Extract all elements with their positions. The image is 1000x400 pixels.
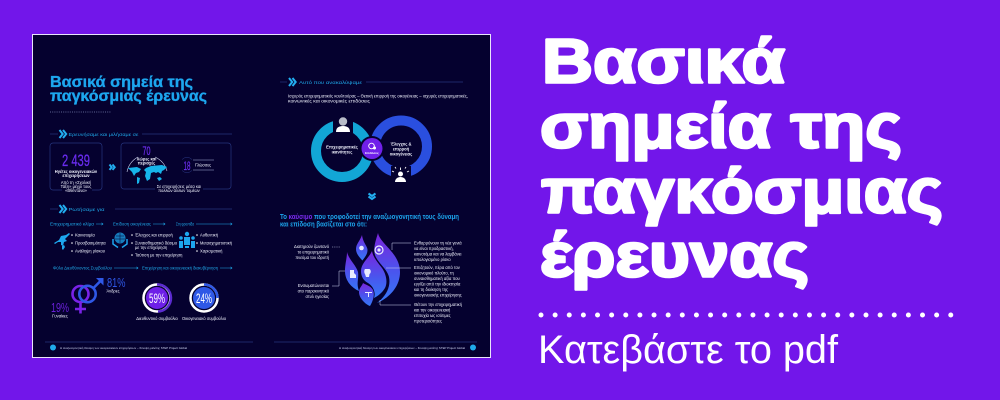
right page footer bbox=[274, 342, 477, 350]
stat box: next generation leaders: 2 439 bbox=[62, 152, 90, 170]
linked rings diagram: επιρροή bbox=[393, 146, 410, 152]
linked rings diagram: Έλεγχος & bbox=[391, 142, 412, 146]
stat box: next generation leaders: «Βθέντανα» bbox=[65, 188, 88, 193]
linked rings diagram: οικογένειας bbox=[390, 152, 412, 156]
chart: CEO gender split: Άνδρες bbox=[106, 288, 120, 294]
main title bbox=[540, 28, 943, 290]
stat box: next generation leaders: Από τη «Σχολική bbox=[61, 180, 92, 185]
section header: we asked about: Ρωτήσαμε για bbox=[68, 207, 105, 212]
section header: surveyed: Ερευνήσαμε και μιλήσαμε σε bbox=[68, 132, 139, 137]
callouts: right of flame: Ενθαρρύνουν τη νέα γενιά bbox=[414, 240, 462, 246]
icon: entrepreneur bbox=[333, 114, 353, 133]
callouts: left of flame: Ενσωματώνονται bbox=[298, 283, 329, 288]
bullet list: family performance: Συναισθηματικό δέσιμο bbox=[135, 240, 178, 246]
chart: CEO gender split: Γυναίκες bbox=[52, 314, 68, 318]
male symbol bbox=[79, 280, 102, 302]
chart: CEO gender split: 19% bbox=[51, 300, 69, 315]
report preview panel bbox=[32, 34, 491, 358]
chart: CEO gender split: 81% bbox=[107, 275, 126, 290]
donut: family board: Οικογενειακό συμβούλιο bbox=[182, 316, 227, 321]
left page footer bbox=[45, 342, 253, 350]
stat box: countries and languages: Σε επιχειρήσεις μέσα και bbox=[157, 184, 201, 189]
stat box: countries and languages: 70 bbox=[142, 144, 151, 158]
callouts: left of flame bbox=[294, 244, 345, 299]
left page footer: Η αναζωογονητική δύναμη των οικογενειακών επιχειρήσεων – Σύνοψη μελέτης STEP Project Global bbox=[60, 346, 187, 350]
centre circle: resilience: Επιδόσεις bbox=[365, 151, 379, 155]
download link: Κατεβάστε το pdf bbox=[538, 328, 839, 372]
left page heading: Βασικά σημεία της bbox=[50, 74, 193, 91]
flame illustration bbox=[345, 233, 400, 306]
donut: family board: 24% bbox=[196, 290, 212, 306]
bullet list: leadership: Μετασχηματιστική bbox=[200, 240, 233, 246]
bullet list: leadership: Χαρισματική bbox=[200, 248, 223, 254]
bullet list: family performance: Ταύτιση με την επιχείρηση bbox=[135, 252, 183, 258]
sub headers: CEO gender, governance: Φύλο Διευθύνοντος Συμβούλου bbox=[53, 266, 113, 270]
stat box: countries and languages: Χώρες και bbox=[137, 156, 156, 162]
sub headers: CEO gender, governance: Επιχείρηση και οικογενειακή διακυβέρνηση bbox=[142, 266, 219, 270]
stat box: next generation leaders: επιχειρήσεων bbox=[62, 173, 90, 178]
stat box: countries and languages: περιοχές bbox=[138, 160, 155, 166]
section header: surveyed bbox=[50, 130, 232, 138]
female symbol bbox=[72, 286, 88, 314]
icon: hands with globe bbox=[113, 232, 127, 248]
icon: family network bbox=[391, 166, 411, 183]
left page heading: παγκόσμιας έρευνας bbox=[50, 88, 207, 105]
callouts: right of flame: Επιζητούν, πέρα από τον bbox=[414, 265, 460, 270]
bullet list: business climate: Ανάληψη ρίσκου bbox=[75, 248, 106, 254]
chart: CEO gender split bbox=[51, 275, 126, 318]
fuel heading bbox=[280, 212, 459, 228]
callouts: right of flame: εγγίζει από την ιδιοκτησία bbox=[414, 282, 461, 286]
right page footer: Η αναζωογονητική δύναμη των οικογενειακών επιχειρήσεων – Σύνοψη μελέτης STEP Project Global bbox=[339, 346, 465, 350]
callouts: right of flame: προτεραιότητες bbox=[414, 318, 442, 324]
arrow between stat boxes bbox=[110, 165, 113, 170]
intro paragraph bbox=[288, 94, 468, 104]
bullet list: leadership bbox=[196, 232, 233, 254]
linked rings diagram: Επιχειρηματικές bbox=[326, 144, 358, 150]
stat box: countries and languages: πολλών άλλων τομέων bbox=[158, 188, 200, 193]
callouts: left of flame: στυλ ηγεσίας bbox=[306, 294, 329, 299]
donut: management board bbox=[136, 284, 178, 321]
left page heading bbox=[50, 74, 207, 112]
down chevron bbox=[368, 194, 376, 199]
callouts: right of flame: και τη διοίκηση της bbox=[414, 287, 448, 292]
bullet list: family performance: με την επιχείρηση bbox=[135, 245, 168, 250]
bullet list: family performance: Έλεγχος και επιρροή bbox=[134, 232, 173, 238]
stat box: countries and languages: 18 bbox=[184, 159, 191, 173]
stat box: next generation leaders bbox=[50, 143, 102, 193]
callouts: right of flame: και την οικογενειακή bbox=[414, 308, 451, 312]
linked rings diagram bbox=[316, 114, 427, 183]
section header: what we discovered: Αυτό που ανακαλύψαμε bbox=[299, 80, 362, 85]
bullet list: family performance bbox=[131, 232, 183, 258]
callouts: left of flame: πνεύμα του ιδρυτή bbox=[295, 255, 330, 260]
sub headers with arrows: Επιχειρηματικό κλίμα bbox=[50, 222, 95, 226]
section header: we asked about bbox=[50, 205, 232, 213]
fuel heading: Το καύσιμο που τροφοδοτεί την αναζωογονητική τους δύναμη bbox=[280, 212, 459, 221]
callouts: right of flame: οικονομικό πλούτο, τη bbox=[414, 270, 455, 276]
main title: παγκόσμιας bbox=[541, 158, 943, 226]
callouts: right of flame: οικογενειακής επιχείρησης bbox=[414, 292, 462, 298]
intro paragraph: Ισχυρός επιχειρηματικός κουλτούρας – Θετική επιρροή της οικογένειας – ισχυρές επιχειρηματικές, bbox=[288, 94, 468, 98]
section header: what we discovered bbox=[280, 78, 463, 86]
cyan ring bbox=[316, 125, 368, 177]
callouts: left of flame: στο παρακινητικό bbox=[298, 288, 330, 294]
bullet list: business climate: Καινοτομία bbox=[75, 232, 95, 238]
icon: group of people bbox=[179, 232, 195, 248]
blue ring bbox=[375, 120, 427, 172]
stat box: countries and languages: Γλώσσες bbox=[195, 162, 211, 168]
stat box: next generation leaders: Τάξη» μέχρι τους bbox=[61, 184, 91, 189]
callouts: right of flame: να είναι προδραστική, bbox=[414, 246, 454, 251]
flame icons bbox=[350, 246, 383, 297]
bullet list: business climate bbox=[71, 232, 106, 254]
callouts: left of flame: Διατηρούν ζωντανό bbox=[294, 244, 330, 249]
callouts: left of flame: το επιχειρηματικό bbox=[297, 250, 330, 254]
sub headers with arrows: Επίδοση οικογένειας bbox=[113, 222, 151, 226]
donut: management board: Διευθυντικό συμβούλιο bbox=[136, 316, 178, 321]
donut: family board bbox=[182, 284, 227, 321]
dotted divider bbox=[541, 312, 951, 318]
icon: runner bbox=[54, 233, 70, 250]
callouts: right of flame: επιτυχία ως ισότιμες bbox=[414, 313, 451, 318]
fuel heading: και επίδοση βασίζεται στο ότι: bbox=[280, 220, 367, 228]
callouts: right of flame: Θέτουν την επιχειρηματική bbox=[414, 302, 463, 307]
icon: world map bbox=[128, 165, 167, 184]
main title: Βασικά bbox=[542, 28, 785, 96]
intro paragraph: κοινωνικές και οικονομικές επιδόσεις bbox=[288, 98, 370, 104]
donut: management board: 59% bbox=[149, 290, 165, 306]
sub headers: CEO gender, governance bbox=[53, 266, 232, 270]
callouts: right of flame: καινοτόμα και να λαμβάνει bbox=[414, 252, 462, 256]
sub headers with arrows bbox=[50, 222, 232, 226]
sub headers with arrows: Στη φροντίδα bbox=[176, 222, 194, 226]
callouts: right of flame bbox=[380, 240, 463, 324]
main title: έρευνας bbox=[540, 222, 809, 290]
main title: σημεία της bbox=[540, 92, 902, 162]
callouts: right of flame: συναισθηματική αξία που bbox=[414, 276, 461, 281]
bullet list: leadership: Αυθεντική bbox=[200, 232, 219, 238]
linked rings diagram: ικανότητες bbox=[332, 150, 352, 154]
bullet list: business climate: Προσβασιμότητα bbox=[75, 240, 106, 246]
stat box: countries and languages bbox=[121, 143, 231, 193]
stat box: next generation leaders: Ηγέτες οικογενειακών bbox=[55, 169, 98, 174]
callouts: right of flame: υπολογισμένο ρίσκο bbox=[414, 257, 451, 262]
